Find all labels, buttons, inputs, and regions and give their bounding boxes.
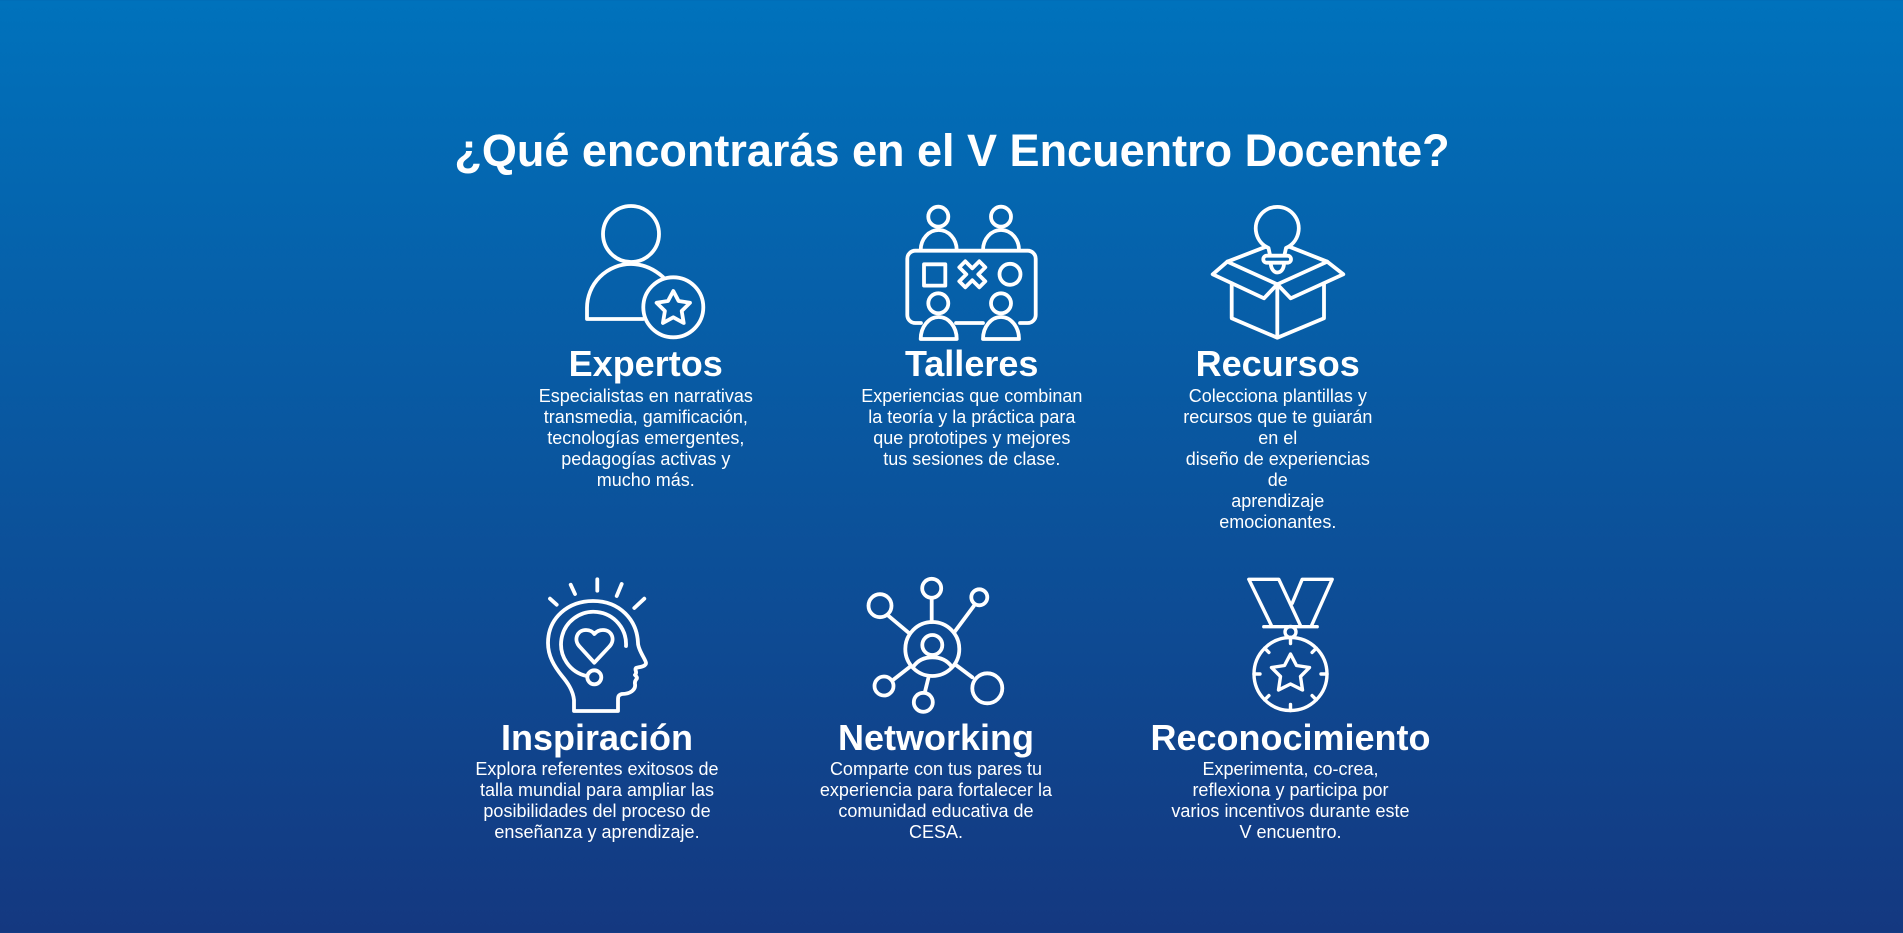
- panel: Expertos: [539, 204, 753, 490]
- text: Networking description: experiencia para fortalecer la: [820, 780, 1052, 800]
- text: Expertos description: Especialistas en narrativas: [539, 386, 753, 406]
- text: Reconocimiento description: reflexiona y participa por: [1192, 780, 1389, 800]
- panel: Talleres: [861, 204, 1082, 469]
- text: Recursos description: aprendizaje: [1231, 491, 1324, 511]
- text: Networking description: CESA.: [909, 822, 963, 842]
- text: Expertos description: tecnologías emergentes,: [547, 428, 744, 448]
- heading: Inspiración: Inspiración: [501, 717, 693, 758]
- text: Talleres description: [861, 386, 1082, 469]
- panel: Recursos: [1183, 205, 1372, 532]
- heading: Reconocimiento: Reconocimiento: [1150, 717, 1431, 758]
- text: Inspiración description: Explora referentes exitosos de: [475, 759, 719, 779]
- text: Reconocimiento description: Experimenta, co-crea,: [1202, 759, 1379, 779]
- text: Talleres description: que prototipes y mejores: [873, 428, 1070, 448]
- text: Expertos description: mucho más.: [597, 470, 695, 490]
- text: Expertos description: [539, 386, 753, 490]
- icon: workshop table: [905, 204, 1038, 341]
- panel: Reconocimiento: [1150, 578, 1431, 842]
- heading: Expertos: Expertos: [569, 343, 723, 384]
- text: Talleres description: tus sesiones de clase.: [883, 449, 1060, 469]
- icon: box with light bulb: [1210, 205, 1346, 340]
- text: Recursos description: Colecciona plantillas y: [1189, 386, 1367, 406]
- text: Networking description: Comparte con tus pares tu: [830, 759, 1042, 779]
- text: Inspiración description: [475, 759, 719, 842]
- icon: head with heart: [546, 577, 648, 713]
- text: Networking description: [820, 759, 1052, 842]
- icon: network of people: [866, 576, 1004, 714]
- title: ¿Qué encontrarás en el V Encuentro Docente?: [454, 125, 1450, 176]
- text: Recursos description: recursos que te guiarán: [1183, 407, 1372, 427]
- text: Inspiración description: talla mundial para ampliar las: [480, 780, 714, 800]
- text: Recursos description: emocionantes.: [1219, 512, 1336, 532]
- panel: Networking: [820, 576, 1052, 842]
- icon: medal with ribbon: [1247, 578, 1334, 712]
- text: Expertos description: transmedia, gamificación,: [544, 407, 748, 427]
- text: Recursos description: [1183, 386, 1372, 532]
- text: Talleres description: Experiencias que combinan: [861, 386, 1082, 406]
- text: Reconocimiento description: V encuentro.: [1239, 822, 1342, 842]
- text: Inspiración description: posibilidades del proceso de: [483, 801, 711, 821]
- icon: expert with star badge: [585, 204, 706, 340]
- heading: Recursos: Recursos: [1196, 343, 1360, 384]
- text: Recursos description: en el: [1258, 428, 1297, 448]
- text: Recursos description: de: [1268, 470, 1288, 490]
- text: Talleres description: la teoría y la práctica para: [868, 407, 1075, 427]
- text: Recursos description: diseño de experiencias: [1186, 449, 1370, 469]
- panel: Inspiración: [475, 577, 719, 842]
- text: Inspiración description: enseñanza y aprendizaje.: [494, 822, 700, 842]
- text: Reconocimiento description: varios incentivos durante este: [1171, 801, 1410, 821]
- heading: Networking: Networking: [838, 717, 1034, 758]
- text: Networking description: comunidad educativa de: [838, 801, 1034, 821]
- text: Expertos description: pedagogías activas y: [561, 449, 730, 469]
- text: Reconocimiento description: [1171, 759, 1410, 842]
- heading: Talleres: Talleres: [905, 343, 1038, 384]
